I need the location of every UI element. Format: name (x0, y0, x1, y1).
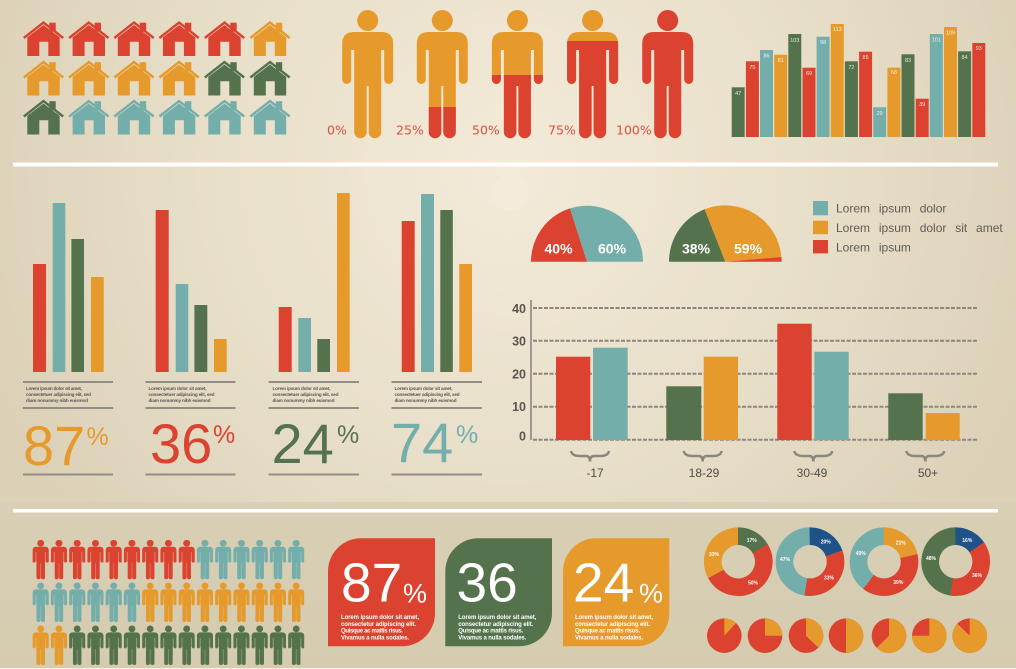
donut chart 4: 48% (926, 556, 937, 562)
caption: Lorem ipsum dolor sit amet, (394, 386, 452, 391)
bar values: 68 (891, 70, 897, 76)
donut chart 1 (704, 527, 773, 596)
percentage labels: 50% (472, 122, 500, 138)
divider top (13, 162, 998, 166)
bars (402, 194, 472, 372)
card: 36: Vivamus a nulla sodales. (458, 635, 527, 641)
donut chart 1: 50% (748, 580, 759, 586)
bar values: 72 (848, 65, 854, 71)
donut chart 2 (778, 530, 842, 594)
panel: column 87% (23, 203, 113, 477)
house row 2 (24, 62, 290, 96)
caption: Lorem ipsum dolor sit amet, (272, 386, 330, 391)
caption: diam nonummy nibh euismod (394, 398, 457, 403)
house row 3 (24, 101, 290, 134)
card: 24% (563, 538, 669, 646)
card: 87%: Quisque ac mattis risus. (341, 629, 403, 635)
card: 87%: Lorem ipsum dolor sit amet, (341, 615, 419, 621)
card: 36: consectetur adipiscing elit. (458, 622, 534, 628)
card: 36: Quisque ac mattis risus. (458, 629, 524, 635)
house row 1 (24, 22, 290, 56)
donut chart 4: 36% (972, 573, 983, 579)
grouped bar chart: age groups (512, 300, 977, 480)
bar values: 75 (749, 65, 755, 71)
bar values: 85 (863, 55, 869, 61)
caption (394, 386, 460, 403)
x axis labels: 50+ (918, 466, 938, 480)
panel: column 74% (391, 194, 482, 476)
legend: Lorem ipsum dolor (836, 201, 946, 215)
person 0% (342, 10, 393, 138)
caption: diam nonummy nibh euismod (272, 398, 335, 403)
x axis labels (586, 466, 938, 480)
people row 3 (33, 626, 304, 665)
caption: Lorem ipsum dolor sit amet, (148, 386, 206, 391)
grid lines and axis (531, 300, 977, 440)
card: 36: Lorem ipsum dolor sit amet, (458, 615, 537, 621)
stat: % (337, 421, 359, 449)
card: 36 (445, 538, 552, 646)
stat: 36 (150, 412, 212, 475)
bar values: 29 (877, 111, 883, 117)
people row 1 (33, 540, 304, 579)
bar values (735, 27, 982, 117)
donut chart 2: 33% (824, 576, 835, 582)
x axis labels: 30-49 (797, 466, 828, 480)
card: 87%: % (403, 578, 427, 608)
card: 87% (328, 538, 435, 646)
bar values: 101 (932, 38, 941, 44)
bar values: 83 (905, 58, 911, 64)
stat: % (213, 421, 235, 449)
card: 36: 36 (456, 552, 518, 614)
y axis labels: 40 (512, 302, 526, 316)
legend: Lorem ipsum dolor sit amet (836, 221, 1003, 235)
caption: diam nonummy nibh euismod (26, 398, 88, 403)
stat: % (456, 421, 478, 449)
card: 24%: Quisque ac mattis risus. (575, 629, 640, 635)
donut chart 3: 39% (893, 580, 904, 586)
caption: consectetuer adipiscing elit, sed (26, 392, 91, 397)
bar values: 86 (763, 54, 770, 60)
panel: column 36% (146, 210, 236, 476)
bar values: 103 (790, 38, 799, 44)
stat: 87 (23, 414, 85, 477)
percentage labels: 75% (548, 122, 576, 138)
card: 24%: Vivamus a nulla sodales. (575, 635, 643, 641)
legend: Lorem ipsum (836, 240, 911, 254)
y axis labels: 30 (512, 334, 526, 348)
bar values: 98 (820, 40, 826, 46)
y axis labels: 20 (512, 368, 526, 382)
person 25% (417, 10, 468, 138)
percentage labels: 0% (327, 122, 347, 138)
donut chart 3 (848, 526, 920, 598)
bars (556, 324, 960, 440)
caption (26, 386, 91, 403)
bars (279, 193, 350, 372)
braces (571, 451, 944, 462)
panel: house pictogram (24, 22, 290, 134)
donut chart 2: 20% (821, 540, 831, 546)
half pie chart 2 (669, 205, 782, 262)
donut chart 1: 17% (747, 538, 757, 544)
bar values: 93 (976, 46, 982, 52)
panel: column 24% (268, 193, 359, 476)
caption: consectetuer adipiscing elit, sed (394, 392, 460, 397)
caption (272, 386, 339, 403)
half pie chart 2: 38% (682, 240, 711, 256)
bar values: 109 (946, 30, 955, 36)
donut chart 4 (920, 526, 991, 597)
legend (813, 201, 1003, 254)
card: 87%: consectetur adipiscing elit. (341, 622, 416, 628)
bars (33, 203, 104, 372)
bar values: 47 (735, 91, 741, 97)
y axis labels: 0 (519, 430, 526, 444)
card: 87%: Vivamus a nulla sodales. (341, 635, 409, 641)
card: 24%: 24 (573, 552, 634, 614)
caption: consectetuer adipiscing elit, sed (272, 392, 339, 397)
percentage labels: 25% (396, 122, 424, 138)
panel: people grid (33, 540, 304, 665)
person 75% (567, 10, 618, 138)
percentage labels (327, 122, 652, 138)
bars (156, 210, 227, 372)
x axis labels: 18-29 (689, 466, 720, 480)
divider bottom (13, 509, 998, 512)
person 100% (642, 10, 693, 138)
half pie chart 2: 59% (734, 240, 763, 256)
bar values: 113 (833, 27, 842, 33)
card: 24%: consectetur adipiscing elit. (575, 622, 650, 628)
x axis labels: -17 (586, 466, 604, 480)
bar values: 39 (919, 102, 925, 108)
panel: people percentage scale (327, 10, 693, 138)
half pie chart 1: 40% (544, 240, 573, 256)
card: 24%: Lorem ipsum dolor sit amet, (575, 615, 653, 621)
person 50% (492, 10, 543, 138)
percentage labels: 100% (616, 122, 652, 138)
donut chart 1: 33% (709, 552, 720, 558)
bar values: 69 (806, 71, 812, 77)
bar values: 81 (778, 58, 784, 64)
stat: 74 (391, 411, 453, 474)
donut chart 3: 21% (896, 540, 906, 546)
small pie charts row (707, 618, 987, 653)
donut chart 2: 47% (780, 557, 791, 563)
caption (148, 386, 215, 403)
card: 24%: % (639, 578, 663, 608)
donut chart 4: 16% (962, 538, 973, 544)
caption: Lorem ipsum dolor sit amet, (26, 386, 82, 391)
people row 2 (33, 583, 304, 622)
stat: 24 (272, 412, 334, 475)
y axis labels (512, 302, 526, 444)
caption: consectetuer adipiscing elit, sed (148, 392, 215, 397)
half pie chart 1 (531, 206, 643, 262)
half pie chart 1: 60% (598, 240, 627, 256)
bar chart: top right (732, 24, 985, 137)
caption: diam nonummy nibh euismod (148, 398, 211, 403)
donut chart 3: 40% (856, 551, 866, 557)
card: 87%: 87 (341, 552, 402, 614)
bar values: 84 (962, 55, 968, 61)
y axis labels: 10 (512, 400, 526, 414)
stat: % (86, 423, 109, 451)
